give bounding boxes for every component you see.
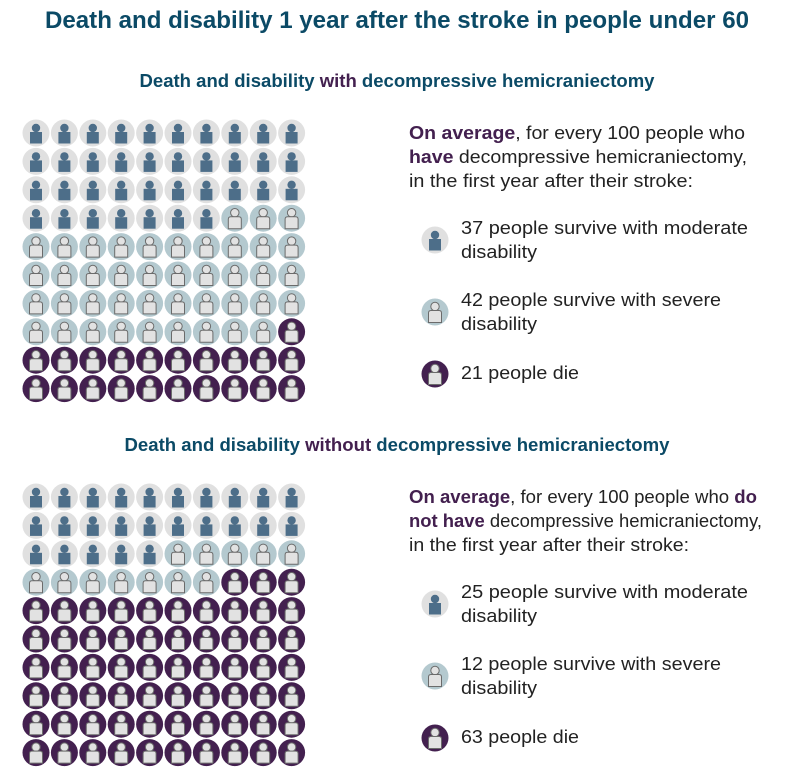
legend: with xyxy=(422,218,748,388)
legend: without xyxy=(422,582,748,752)
legend: with: 37 people survive with moderate xyxy=(461,218,748,238)
legend: without: disability xyxy=(461,606,537,626)
legend: with: disability xyxy=(461,242,537,262)
legend: without: 12 people survive with severe xyxy=(461,654,721,674)
legend: without: disability xyxy=(461,678,537,698)
text block: without xyxy=(409,487,762,555)
text block: without: On average, for every 100 people who do xyxy=(409,487,757,507)
legend: with: disability xyxy=(461,314,537,334)
legend: with: 42 people survive with severe xyxy=(461,290,721,310)
text block: with: On average , for every 100 people who xyxy=(409,123,745,143)
legend: without: 25 people survive with moderate xyxy=(461,582,748,602)
icon grid: with xyxy=(22,120,305,402)
legend: with: 21 people die xyxy=(461,363,579,383)
text block: without: in the first year after their stroke: xyxy=(409,535,689,555)
title: Death and disability 1 year after the stroke in people under 60 xyxy=(45,7,749,34)
text block: with: in the first year after their stroke: xyxy=(409,171,693,191)
heading: with: Death and disability with decompressive hemicraniectomy xyxy=(140,71,654,91)
text block: without: not have decompressive hemicraniectomy, xyxy=(409,511,762,531)
heading: without: Death and disability without decompressive hemicraniectomy xyxy=(124,435,670,455)
text block: with: have decompressive hemicraniectomy, xyxy=(409,147,747,167)
icon grid: without xyxy=(22,484,305,766)
text block: with xyxy=(409,123,747,191)
legend: without: 63 people die xyxy=(461,727,579,747)
